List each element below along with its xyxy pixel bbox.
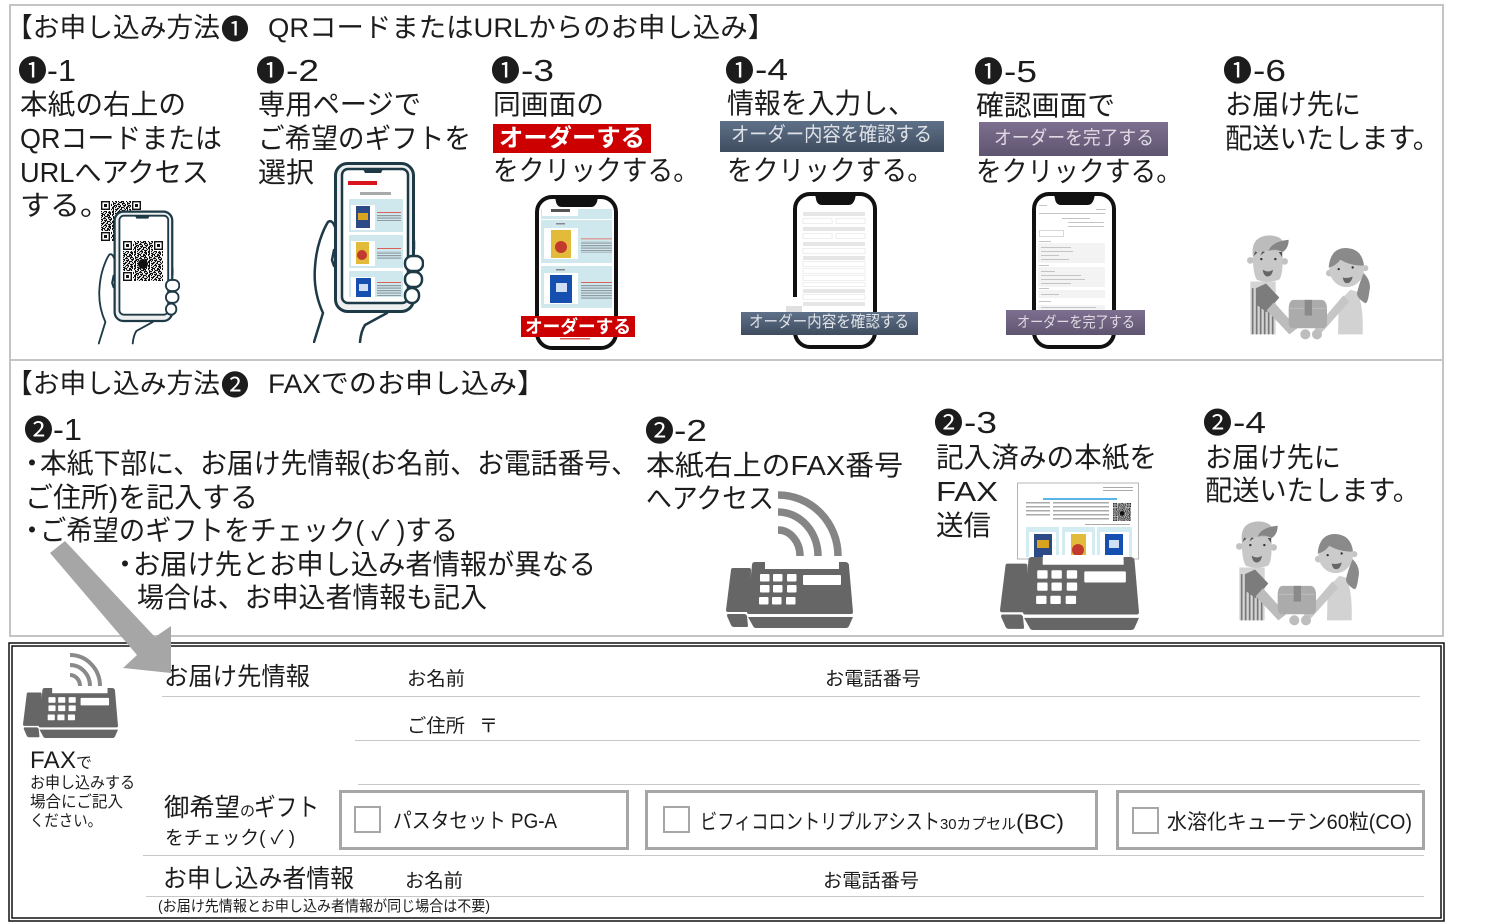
step 2-2 text: ❷ <box>645 408 674 450</box>
step 2-2 text: -2 <box>674 413 707 448</box>
icon: hand holding phone with QR code <box>99 212 179 343</box>
step 1-5 text: ❶ <box>974 49 1003 91</box>
step 2-3 text <box>934 400 1157 541</box>
step 2-3 text: -3 <box>964 405 997 440</box>
step 1-2 text: ❶ <box>256 48 285 90</box>
step 1-1 text: -1 <box>47 53 76 88</box>
step 1-3 text: をクリックする。 <box>493 155 699 186</box>
step 1-6 text: 配送いたします。 <box>1225 123 1440 154</box>
option: bifidus: 30カプセル <box>940 816 1016 833</box>
section: gift selection <box>164 792 1424 849</box>
heading: method 2: ❷ <box>221 370 249 401</box>
step 2-1 text: -1 <box>53 412 82 447</box>
step 2-3 text: FAX <box>936 476 998 507</box>
phone: gift page with order button <box>521 197 635 348</box>
step 2-1 text: 場合は、お申込者情報も記入 <box>137 582 487 613</box>
section: gift selection: をチェック( ✓ ) <box>165 827 295 849</box>
option: bifidus: ビフィコロントリプルアシスト <box>700 811 940 834</box>
step 1-1 text: ❶ <box>18 48 47 90</box>
heading: method 1: 【お申し込み方法 <box>6 13 220 43</box>
section: applicant information: お電話番号 <box>823 870 919 892</box>
icon: hand holding phone with gift page <box>314 164 423 342</box>
step 1-6 text: -6 <box>1253 53 1286 88</box>
heading: method 1: ❶ <box>221 14 249 45</box>
step 2-4 text: ❷ <box>1203 400 1232 442</box>
section: gift selection: ギフト <box>254 794 319 822</box>
button: confirm order: オーダー内容を確認する <box>731 123 932 146</box>
icon: fax with signal waves <box>726 495 853 628</box>
section: applicant information <box>143 856 1424 915</box>
step 1-6 text: ❶ <box>1223 48 1252 90</box>
step 2-4 text <box>1203 400 1420 506</box>
button: order on phone: オーダーする <box>525 316 631 337</box>
step 1-4 text: -4 <box>755 52 788 87</box>
phone: confirmation page with complete button <box>1006 194 1145 347</box>
step 2-2 text: 本紙右上のFAX番号 <box>646 450 903 481</box>
step 2-1 text: ・ <box>18 448 46 479</box>
section: applicant information: お申し込み者情報 <box>163 865 354 893</box>
step 2-4 text: -4 <box>1233 405 1266 440</box>
section: gift selection: の <box>240 803 255 820</box>
icon: fax feeding the order sheet <box>1000 483 1139 630</box>
step 2-1 text: お届け先とお申し込み者情報が異なる <box>133 549 596 580</box>
phone: order form with confirm button <box>741 194 918 347</box>
note: fax instructions: ください。 <box>30 812 102 830</box>
step 1-2 text: -2 <box>286 53 319 88</box>
panel: FAX order form <box>9 643 1444 921</box>
step 1-3 text: 同画面の <box>493 89 604 120</box>
step 1-2 text: 選択 <box>258 157 314 188</box>
panel: FAX application method <box>6 360 1443 636</box>
step 1-4 text: をクリックする。 <box>727 155 933 186</box>
step 1-6 text <box>1223 48 1440 154</box>
note: fax instructions <box>30 747 135 830</box>
step 1-2 text: 専用ページで <box>258 89 421 120</box>
step 2-2 text: へアクセス <box>646 483 774 514</box>
button: complete order: オーダーを完了する <box>994 127 1154 149</box>
step 1-5 text: -5 <box>1004 54 1037 89</box>
section: delivery information: ご住所 <box>407 715 465 737</box>
section: applicant information: お名前 <box>405 870 463 892</box>
option: coenzyme <box>1118 792 1424 848</box>
note: fax instructions: で <box>76 755 92 772</box>
step 1-2 text <box>256 48 471 188</box>
section: delivery information <box>162 663 1420 784</box>
step 2-1 text: ご住所)を記入する <box>25 482 258 513</box>
section: gift selection: 御希望 <box>164 794 240 822</box>
button: confirm order on phone <box>741 312 918 335</box>
arrow: from instructions to form <box>50 541 171 673</box>
button: complete order on phone: オーダーを完了する <box>1017 314 1135 331</box>
section: applicant information: (お届け先情報とお申し込み者情報が同じ場合は不要) <box>158 898 490 915</box>
step 2-1 text: ご希望のギフトをチェック( ✓ )する <box>40 515 458 546</box>
heading: method 1: QRコードまたはURLからのお申し込み】 <box>268 13 775 43</box>
icon: delivery person handing parcel <box>1236 521 1359 625</box>
step 1-1 text: QRコードまたは <box>20 123 222 154</box>
option: coenzyme: 水溶化キューテン60粒(CO) <box>1167 811 1412 834</box>
step 1-1 text: 本紙の右上の <box>20 89 186 120</box>
step 1-3 text: -3 <box>521 53 554 88</box>
step 1-3 text: ❶ <box>491 48 520 90</box>
option: pasta set: パスタセット PG-A <box>393 810 557 833</box>
section: delivery information: お電話番号 <box>825 668 921 690</box>
icon: delivery person handing parcel <box>1247 235 1370 339</box>
step 1-4 text <box>720 48 944 186</box>
button: confirm order on phone: オーダー内容を確認する <box>749 313 909 331</box>
step 1-5 text <box>974 49 1182 187</box>
step 2-1 text <box>18 407 638 613</box>
button: complete order on phone <box>1006 310 1145 335</box>
button: complete order <box>979 122 1168 156</box>
panel: QR / URL application method <box>6 5 1443 360</box>
heading: method 2 <box>6 369 545 401</box>
step 1-1 text: URLへアクセス <box>20 157 209 188</box>
note: fax instructions: 場合にご記入 <box>30 793 123 811</box>
note: fax instructions: お申し込みする <box>30 774 135 792</box>
button: confirm order <box>720 121 944 152</box>
step 1-5 text: 確認画面で <box>976 90 1115 121</box>
heading: method 2: 【お申し込み方法 <box>6 369 220 399</box>
icon: QR code on paper <box>101 201 141 241</box>
step 1-5 text: をクリックする。 <box>976 156 1182 187</box>
section: delivery information: 〒 <box>479 716 498 737</box>
section: delivery information: お届け先情報 <box>164 663 310 691</box>
step 2-3 text: 記入済みの本紙を <box>936 442 1157 473</box>
option: bifidus <box>646 792 1096 848</box>
step 1-1 text: する。 <box>20 190 110 221</box>
step 2-3 text: 送信 <box>936 510 991 541</box>
icon: small fax with waves <box>23 655 118 738</box>
step 1-2 text: ご希望のギフトを <box>258 123 471 154</box>
step 1-3 text <box>491 48 699 186</box>
section: delivery information: お名前 <box>407 668 465 690</box>
option: pasta set <box>340 792 628 848</box>
step 1-1 text <box>18 48 222 221</box>
step 2-2 text <box>645 408 903 514</box>
step 2-1 text: ・ <box>111 549 139 580</box>
step 2-4 text: 配送いたします。 <box>1205 475 1420 506</box>
step 1-6 text: お届け先に <box>1225 89 1361 120</box>
note: fax instructions: FAX <box>30 747 76 774</box>
step 2-1 text: ❷ <box>24 407 53 449</box>
step 1-4 text: ❶ <box>725 48 754 90</box>
step 1-4 text: 情報を入力し、 <box>727 88 915 119</box>
heading: method 1 <box>6 13 775 45</box>
button: order: オーダーする <box>499 124 645 152</box>
step 2-3 text: ❷ <box>934 400 963 442</box>
heading: method 2: FAXでのお申し込み】 <box>268 369 545 399</box>
step 2-1 text: 本紙下部に、お届け先情報(お名前、お電話番号、 <box>40 448 638 479</box>
step 2-1 text: ・ <box>18 515 46 546</box>
option: bifidus: (BC) <box>1016 811 1064 834</box>
step 2-4 text: お届け先に <box>1205 442 1341 473</box>
